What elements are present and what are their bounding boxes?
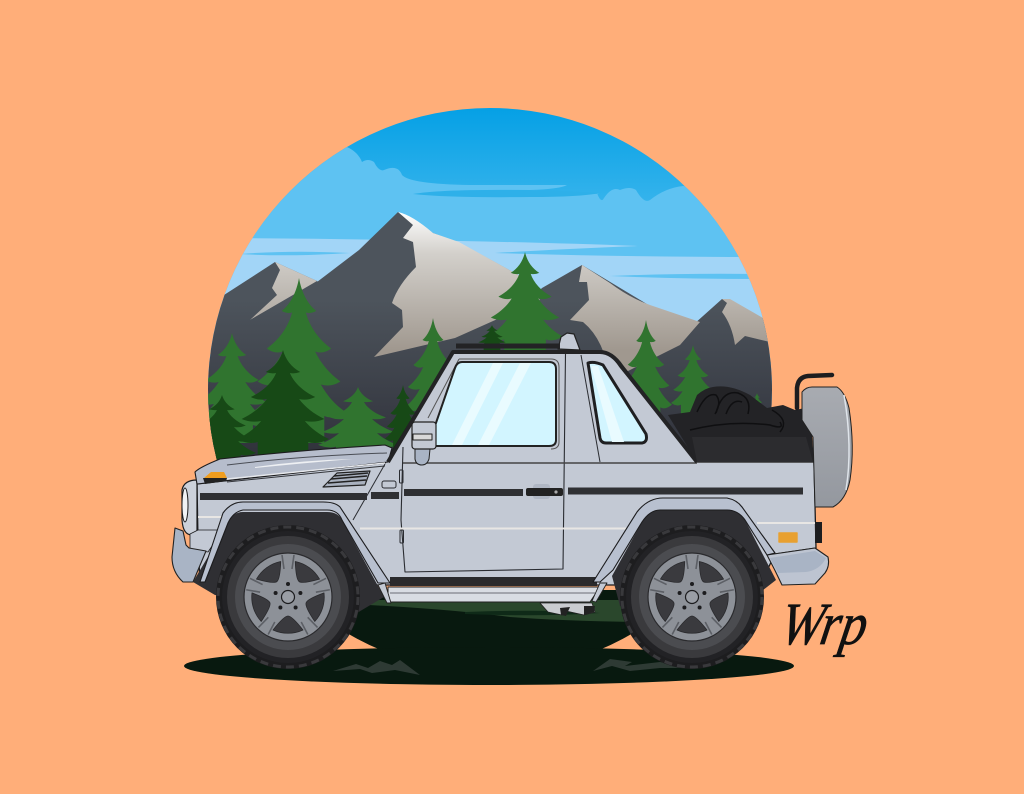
front wheel arch bbox=[193, 512, 384, 613]
tree: far right bbox=[671, 346, 710, 414]
tree: middle light bbox=[318, 387, 394, 448]
tree: tall left bbox=[253, 278, 345, 443]
horizon streak left bbox=[240, 252, 350, 255]
turn signal bbox=[203, 472, 227, 484]
body stripes bbox=[200, 488, 803, 500]
lower front panel bbox=[190, 530, 223, 552]
scenery circle bbox=[188, 100, 780, 680]
ground shadow bbox=[184, 647, 794, 685]
ground crack right bbox=[593, 659, 690, 671]
folded soft top bbox=[668, 386, 814, 462]
door window bbox=[428, 359, 559, 449]
rear lamp bbox=[815, 522, 822, 543]
rear bumper bbox=[767, 548, 829, 585]
tree: dark behind windshield bbox=[385, 386, 415, 448]
mountain: main peak bbox=[210, 212, 560, 460]
front arch flare bbox=[200, 502, 390, 583]
clouds bbox=[200, 147, 780, 300]
cloud band bbox=[413, 190, 600, 197]
car body bbox=[197, 352, 816, 585]
horizon streak right bbox=[610, 274, 760, 279]
side mirror bbox=[412, 422, 436, 465]
door handle bbox=[526, 484, 563, 499]
pale horizon band bbox=[200, 238, 780, 450]
tree: back left bbox=[208, 334, 265, 443]
roof frame bbox=[388, 346, 697, 462]
hood vent bbox=[323, 471, 370, 487]
front wheel bbox=[216, 525, 360, 669]
vehicle bbox=[172, 333, 852, 669]
exhaust bbox=[540, 603, 595, 616]
grille and headlight bbox=[182, 480, 197, 535]
tree: dark centre left bbox=[242, 350, 329, 454]
side sill bbox=[388, 577, 600, 602]
tree: right bbox=[628, 320, 672, 412]
trees bbox=[188, 252, 764, 466]
rear arch flare bbox=[593, 498, 775, 582]
spare wheel bbox=[802, 387, 852, 507]
front bumper bbox=[172, 528, 206, 582]
mountain: centre right bbox=[539, 265, 700, 376]
tree: behind windshield bbox=[408, 318, 446, 411]
mountain: far right bbox=[690, 299, 772, 408]
roll bar bbox=[558, 333, 580, 350]
dark ground bbox=[350, 590, 630, 648]
sky bbox=[200, 100, 780, 400]
hood bbox=[195, 445, 392, 484]
tree: large centre bbox=[491, 252, 562, 350]
illustration bbox=[171, 108, 866, 685]
signature: Wrp bbox=[776, 591, 873, 658]
tree: small dark centre bbox=[478, 325, 506, 350]
rear quarter window bbox=[588, 362, 646, 443]
snorkel handle bbox=[797, 375, 832, 408]
step ends bbox=[378, 583, 391, 603]
rear wheel bbox=[620, 525, 764, 669]
tree: dark far left bbox=[210, 396, 256, 460]
fender and door seams bbox=[353, 353, 813, 572]
rear wheel arch bbox=[612, 510, 776, 606]
tree: tiny right bbox=[754, 394, 762, 403]
ground crack left bbox=[333, 660, 420, 675]
mountain: far left bbox=[208, 262, 318, 460]
side marker bbox=[778, 532, 798, 543]
body highlights bbox=[198, 517, 815, 528]
